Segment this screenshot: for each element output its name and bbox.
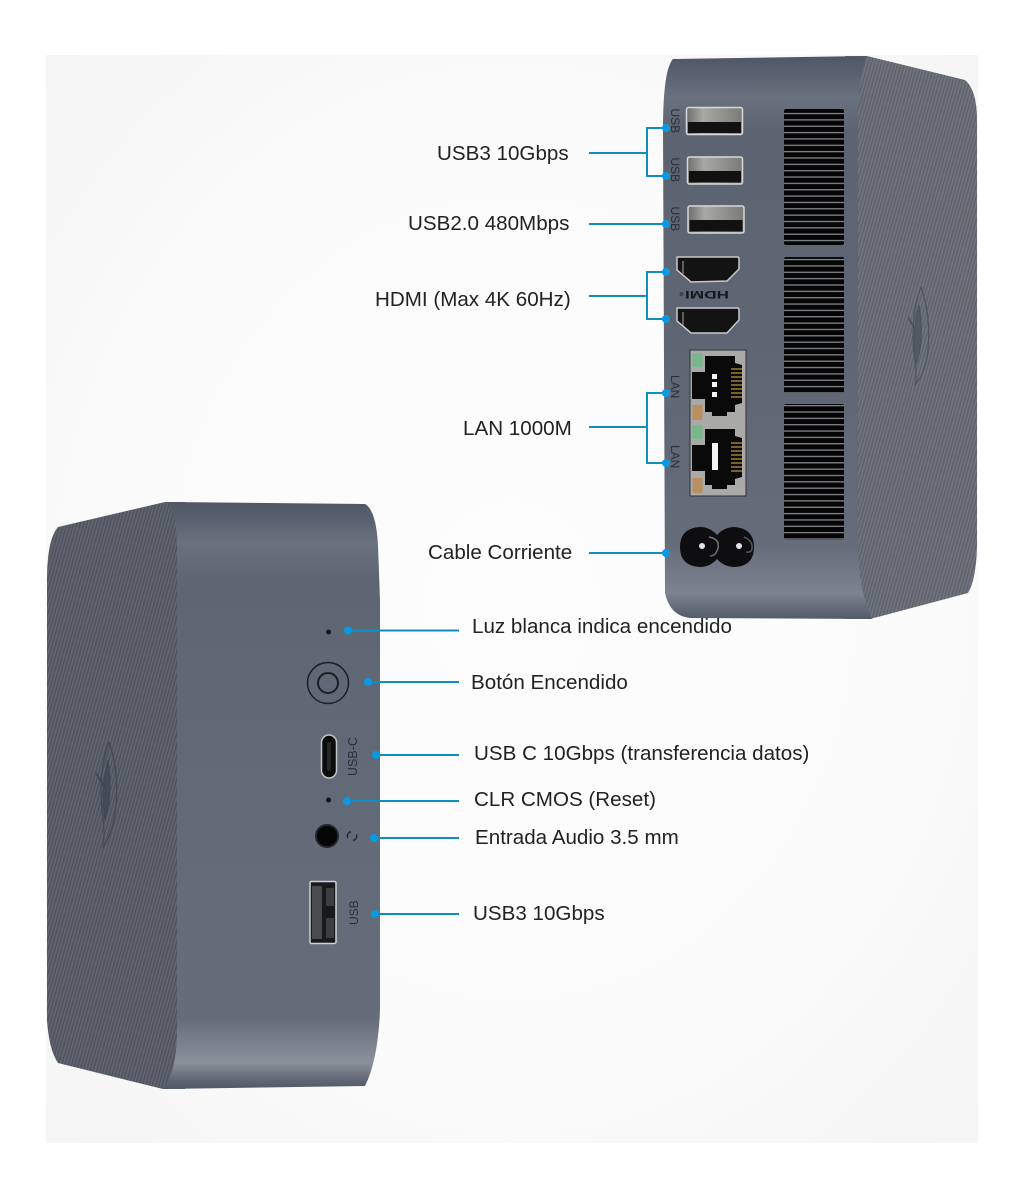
callout: Cable Corriente: Cable Corriente [428, 541, 572, 564]
callout: power light [344, 615, 732, 638]
callout: USB3 10Gbps: USB3 10Gbps [437, 142, 569, 165]
icon: USB port 2 [688, 157, 742, 184]
callout: power light: Luz blanca indica encendido [472, 615, 732, 638]
callout: CLR CMOS [343, 788, 656, 811]
callout: USB C: USB C 10Gbps (transferencia datos) [474, 742, 809, 765]
callout: USB3 front [371, 902, 605, 925]
icon: logo on front device [96, 742, 117, 848]
HDMI label: HDMI [685, 288, 729, 300]
icon: power LED [326, 630, 331, 634]
icon: power socket [680, 527, 754, 567]
callout: audio [370, 826, 679, 849]
side panel: textured rear device side [845, 56, 977, 619]
USB label: USB [347, 900, 361, 925]
USB port labels [668, 108, 682, 231]
side panel: textured front device side [47, 502, 185, 1089]
front panel: rear device ports face [663, 56, 872, 619]
callout: HDMI: HDMI (Max 4K 60Hz) [375, 288, 571, 311]
icon: LAN socket 2 [692, 429, 742, 489]
icon: USB-A port [310, 882, 336, 944]
icon: audio jack [316, 825, 338, 847]
LAN labels: LAN [668, 445, 682, 468]
USB port labels: USB [668, 108, 682, 133]
callout: audio: Entrada Audio 3.5 mm [475, 826, 679, 849]
icon: USB port 3 [688, 206, 744, 233]
USB port labels: USB [668, 158, 682, 182]
callout: USB3 10Gbps [437, 124, 670, 180]
icon: reset pinhole [326, 798, 331, 802]
callout: HDMI [375, 268, 670, 323]
device: rear view mini PC [663, 56, 977, 619]
icon: logo on rear device [908, 287, 929, 385]
device: front view mini PC [47, 502, 380, 1089]
icon: HDMI port 2 [677, 308, 739, 333]
vent top [784, 109, 844, 245]
LAN gold pins [731, 369, 742, 471]
vent middle [784, 257, 844, 393]
USB-C label: USB-C [346, 737, 360, 776]
callout: USB2.0 480Mbps [408, 212, 670, 235]
vent bottom [784, 404, 844, 540]
icon: USB port 1 [686, 108, 742, 134]
icon: headphone symbol [347, 832, 357, 840]
icon: USB-C port [322, 735, 336, 778]
callout: power button: Botón Encendido [471, 671, 628, 694]
LAN LEDs [692, 353, 702, 493]
LAN labels: LAN [668, 375, 682, 398]
callout: power button [364, 671, 628, 694]
icon: LAN socket 1 [692, 356, 742, 416]
callout: USB2.0 480Mbps: USB2.0 480Mbps [408, 212, 569, 235]
LAN labels [668, 375, 682, 468]
callout: LAN 1000M: LAN 1000M [463, 417, 572, 440]
callout: Cable Corriente [428, 541, 670, 564]
icon: HDMI port 1 [677, 257, 739, 282]
LAN port block [690, 350, 746, 496]
icon: HDMI label dot [680, 292, 684, 296]
callout: LAN 1000M [463, 389, 670, 467]
callout: CLR CMOS: CLR CMOS (Reset) [474, 788, 656, 811]
callout: USB3 front: USB3 10Gbps [473, 902, 605, 925]
icon: power button [308, 662, 348, 704]
USB port labels: USB [668, 206, 682, 231]
front panel: front device ports face [164, 502, 380, 1089]
LAN white contacts [712, 374, 718, 470]
